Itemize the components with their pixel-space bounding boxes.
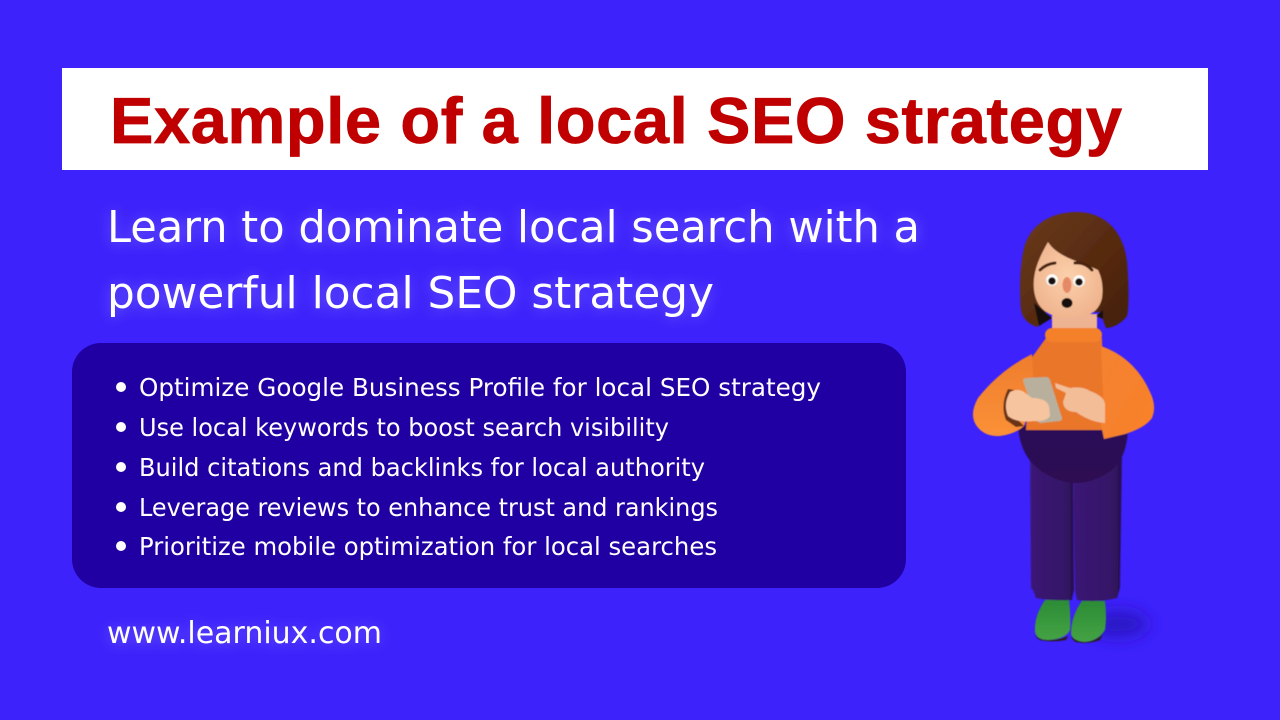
panel: key tactics list (72, 343, 906, 588)
face (1034, 242, 1103, 318)
shoes (1035, 600, 1106, 643)
sleeve cuff shadow (1003, 389, 1024, 427)
list item 3: Build citations and backlinks for local authority (139, 453, 705, 482)
left sleeve (973, 354, 1034, 436)
collar (1045, 328, 1102, 342)
website url: www.learniux.com (107, 616, 382, 651)
eyebrows (1040, 263, 1055, 270)
trousers (1030, 450, 1122, 601)
list item 2: Use local keywords to boost search visibility (139, 413, 669, 442)
list item 4: Leverage reviews to enhance trust and rankings (139, 493, 718, 522)
subtitle: Learn to dominate local search with a (107, 202, 920, 253)
nose (1062, 277, 1072, 293)
floor shadow (1088, 611, 1148, 637)
subtitle (107, 202, 920, 319)
belly (1018, 425, 1128, 483)
neck (1052, 314, 1097, 331)
title banner (62, 68, 1208, 170)
list item 1: Optimize Google Business Profile for local SEO strategy (139, 373, 821, 402)
title: Example of a local SEO strategy (110, 84, 1122, 157)
hair (1020, 212, 1128, 328)
subtitle: powerful local SEO strategy (107, 268, 714, 319)
phone (1023, 377, 1062, 423)
right hand (1055, 383, 1105, 423)
right sleeve (1100, 346, 1154, 439)
hair shadow gaps (1034, 303, 1103, 326)
illustration: woman using a phone (973, 212, 1154, 643)
list item 5: Prioritize mobile optimization for local searches (139, 532, 717, 561)
eyes (1046, 274, 1085, 287)
torso sweater (1026, 338, 1104, 430)
mouth (1062, 298, 1072, 308)
left hand (1006, 390, 1050, 421)
